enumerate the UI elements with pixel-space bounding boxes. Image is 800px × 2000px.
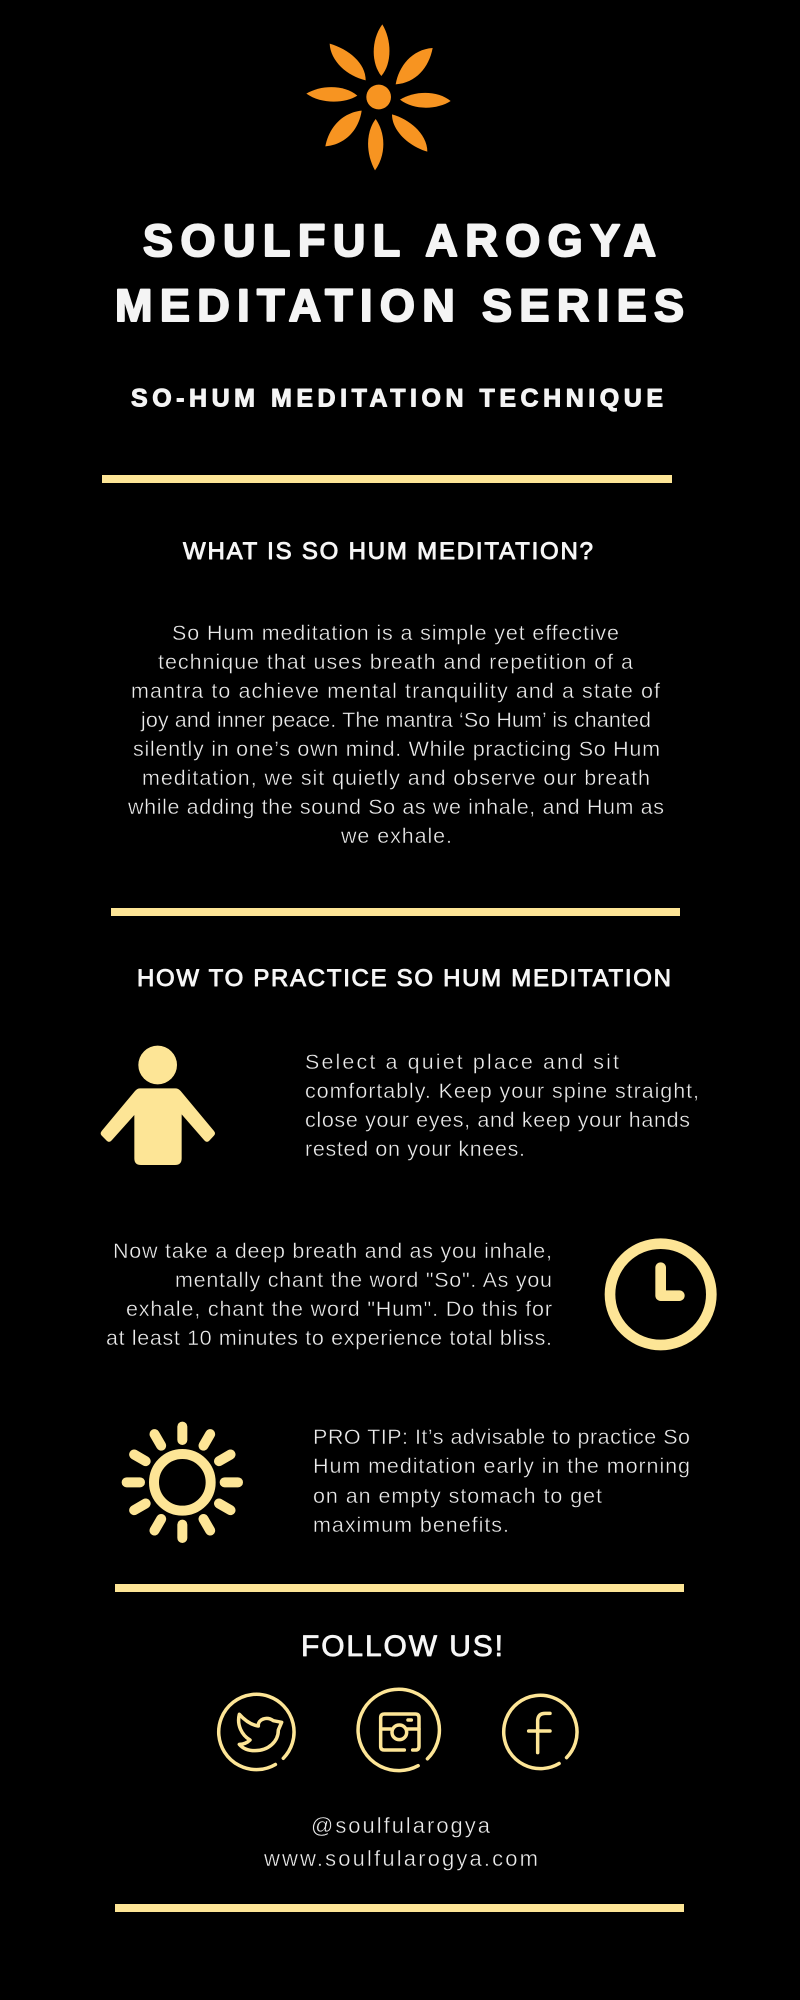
icon: facebook <box>504 1695 577 1769</box>
icon: clock <box>610 1244 711 1345</box>
text block: description: So Hum meditation is a simple yet effective <box>172 621 619 645</box>
icon: twitter <box>219 1694 294 1770</box>
divider bar <box>111 908 680 916</box>
text block: pro tip: on an empty stomach to get <box>313 1484 602 1508</box>
title: MEDITATION SERIES <box>115 280 684 331</box>
text: handle: @soulfularogya <box>311 1813 491 1838</box>
text block: pro tip: PRO TIP: It’s advisable to practice So <box>313 1425 690 1449</box>
subtitle: SO-HUM MEDITATION TECHNIQUE <box>131 384 663 412</box>
divider bar <box>102 475 672 483</box>
text block: pro tip: maximum benefits. <box>313 1513 509 1537</box>
text block: step 1: close your eyes, and keep your hands <box>305 1108 690 1132</box>
text block: pro tip: Hum meditation early in the morning <box>313 1454 690 1478</box>
text: website: www.soulfularogya.com <box>263 1846 538 1871</box>
text block: pro tip <box>313 1425 690 1537</box>
icon: orange flower logo <box>306 24 451 170</box>
text block: description: while adding the sound So as we inhale, and Hum as <box>127 795 664 819</box>
text block: description: mantra to achieve mental tranquility and a state of <box>131 679 660 703</box>
text block: step 2: mentally chant the word "So". As you <box>175 1268 552 1292</box>
text block: step 1: comfortably. Keep your spine straight, <box>305 1079 699 1103</box>
title: SOULFUL AROGYA <box>143 215 656 266</box>
text block: description: technique that uses breath and repetition of a <box>158 650 633 674</box>
text block: step 2: exhale, chant the word "Hum". Do this for <box>126 1297 552 1321</box>
text block: step 1 <box>305 1050 699 1161</box>
text block: description <box>127 621 664 848</box>
text block: step 2: Now take a deep breath and as you inhale, <box>113 1239 552 1263</box>
text block: step 2 <box>106 1239 552 1350</box>
icon: sun <box>127 1427 238 1538</box>
text block: description: meditation, we sit quietly and observe our breath <box>142 766 650 790</box>
text block: step 2: at least 10 minutes to experience total bliss. <box>106 1326 552 1350</box>
divider bar <box>115 1584 684 1592</box>
text block: step 1: Select a quiet place and sit <box>305 1050 619 1074</box>
heading: what is so hum: WHAT IS SO HUM MEDITATION? <box>183 538 593 565</box>
text block: description: joy and inner peace. The mantra ‘So Hum’ is chanted <box>140 708 651 732</box>
icon: person <box>101 1046 215 1165</box>
text block: description: we exhale. <box>340 824 452 848</box>
text block: step 1: rested on your knees. <box>305 1137 525 1161</box>
heading: how to practice: HOW TO PRACTICE SO HUM MEDITATION <box>137 965 671 992</box>
text block: description: silently in one’s own mind. While practicing So Hum <box>133 737 660 761</box>
icon: instagram <box>358 1689 439 1771</box>
divider bar <box>115 1904 684 1912</box>
title <box>115 215 684 331</box>
heading: follow us: FOLLOW US! <box>301 1630 503 1663</box>
